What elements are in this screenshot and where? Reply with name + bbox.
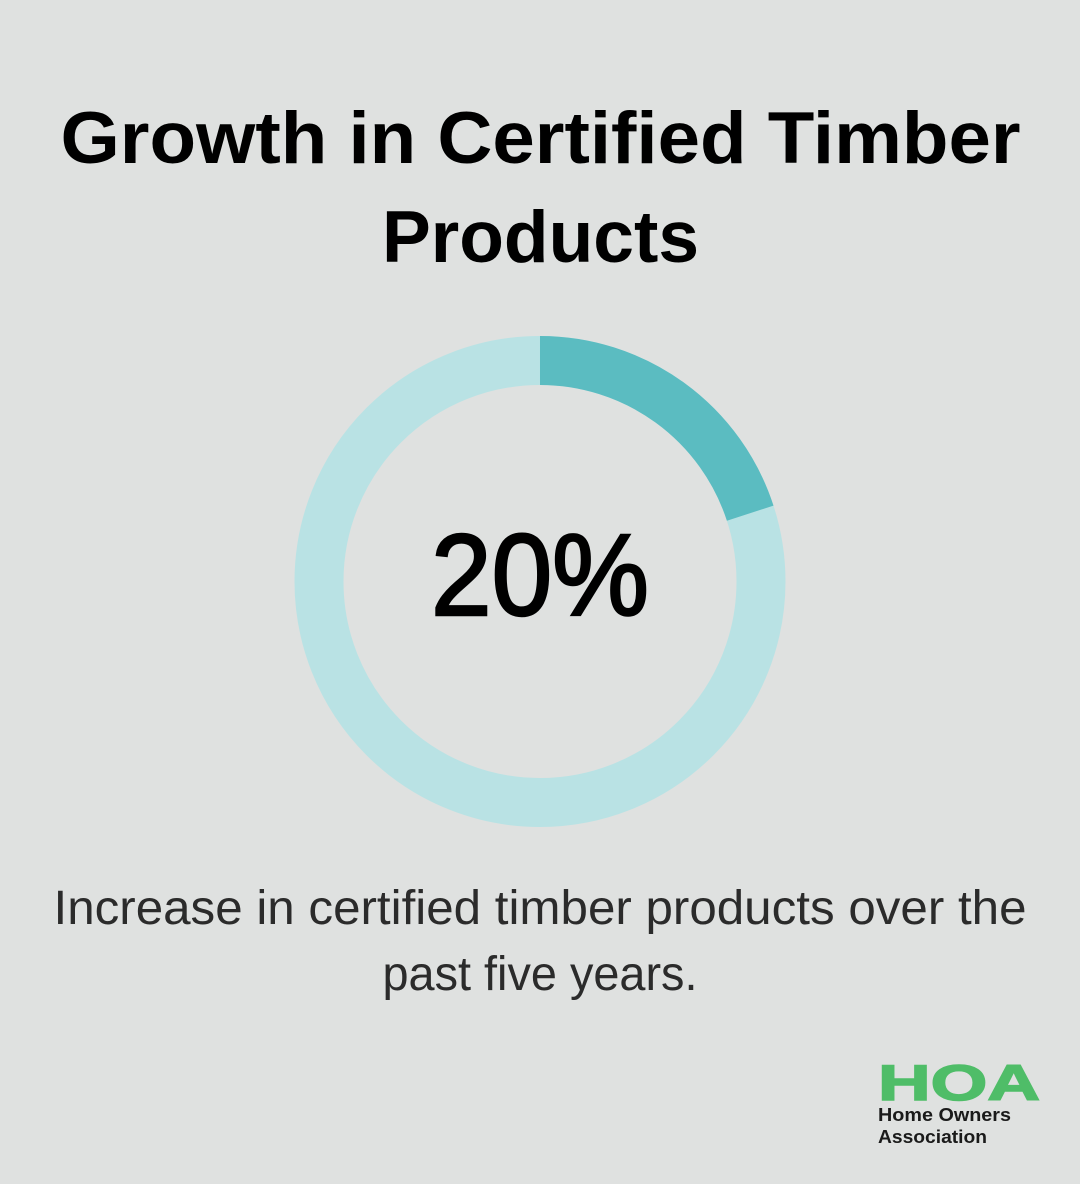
description: past five years. [382,948,698,1001]
logo: HOA: HOA [878,1055,1040,1111]
title: Products [382,197,699,278]
title: Growth in Certified Timber [60,98,1020,179]
logo: HOA: Home Owners [878,1104,1011,1125]
donut value: 20% [431,510,649,640]
title [60,98,1020,278]
description: Increase in certified timber products over the [54,882,1026,935]
logo: HOA: Association [878,1126,987,1147]
description [54,882,1026,1001]
logo: HOA [878,1055,1040,1147]
donut chart [319,360,761,802]
